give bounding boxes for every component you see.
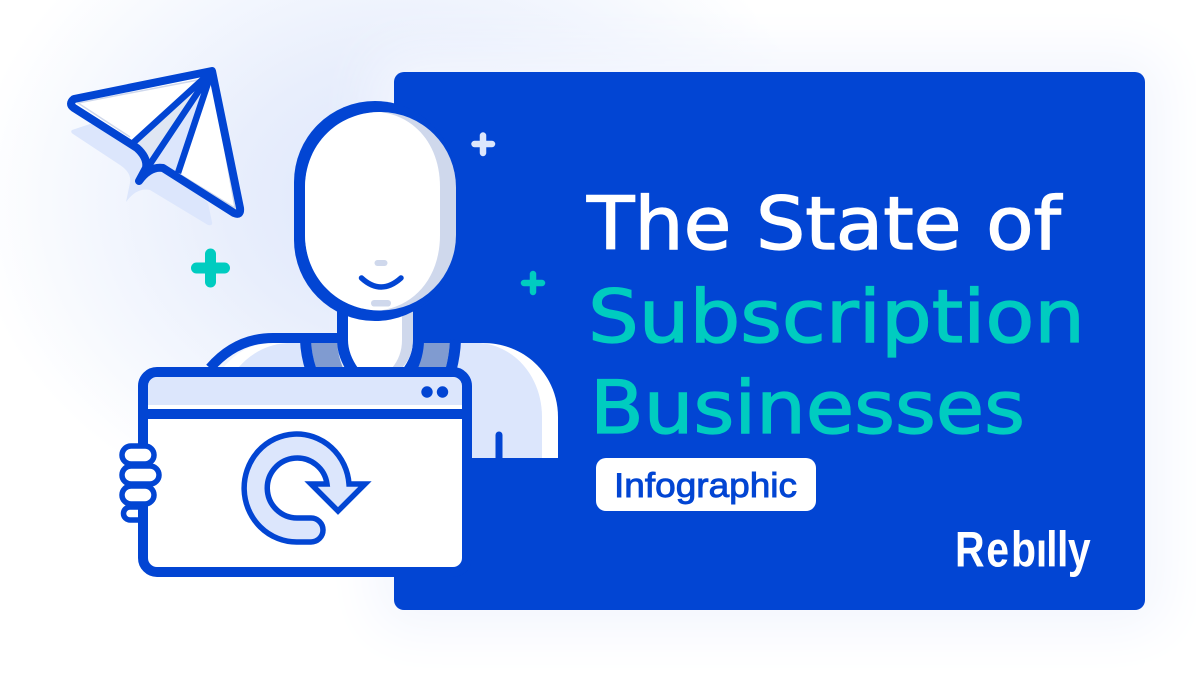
window dots (421, 386, 448, 398)
neck (342, 305, 418, 372)
icon: large teal plus (196, 254, 224, 282)
icon: refresh arrow (244, 434, 365, 542)
head (294, 101, 456, 321)
hand fingers (122, 446, 159, 520)
browser window (143, 372, 467, 572)
panel: blue background (394, 72, 1145, 610)
title: Subscription: Subscription (588, 275, 1085, 360)
smile (362, 278, 401, 287)
collar (306, 340, 456, 370)
title: The State of: The State of (586, 182, 1063, 267)
chin (371, 300, 391, 306)
title bar (148, 377, 462, 405)
icon: paper plane (71, 71, 240, 225)
left shoulder (210, 338, 340, 368)
panel glow (394, 72, 1145, 610)
badge: Infographic (596, 458, 816, 511)
title: Businesses: Businesses (590, 366, 1025, 451)
person (210, 101, 558, 458)
badge: Infographic: Infographic (614, 467, 797, 505)
icon: small teal plus (524, 274, 542, 292)
right shoulder (455, 343, 558, 458)
icon: small white plus (474, 136, 492, 153)
nose (374, 260, 388, 266)
logo: Rebilly: Rebilly (955, 522, 1091, 577)
